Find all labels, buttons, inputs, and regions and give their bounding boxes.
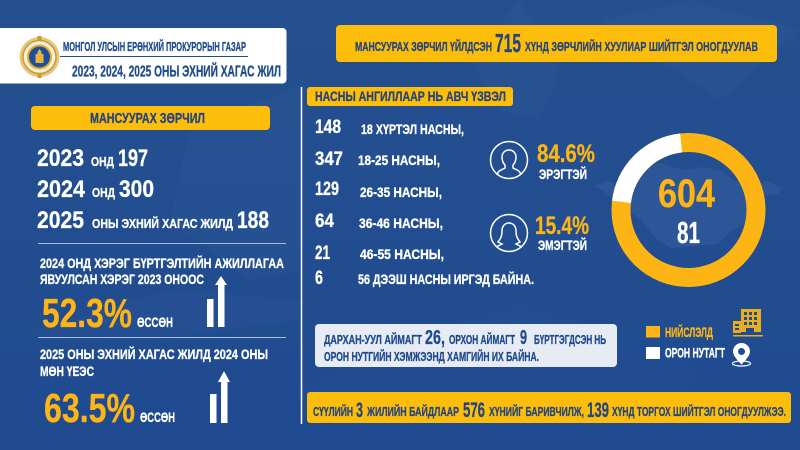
top banner [336,25,777,62]
age breakdown list: 18 ХҮРТЭЛ НАСНЫ, [361,122,464,137]
male share: 84.6% [537,140,595,168]
callout: Darkhan-Uul and Orkhon: ОРОН НУТГИЙН ХЭМЖЭЭНД ХАМГИЙН ИХ БАЙНА. [324,349,539,364]
bottom banner: ХҮНИЙГ БАРИВЧИЛЖ, [489,404,584,419]
yearly counts: ОНД [91,155,114,169]
stat: 63.5% growth [40,347,268,431]
donut chart: 81 [677,215,700,250]
yearly counts: 197 [118,145,148,172]
age breakdown list: 129 [315,178,339,200]
stat: 63.5% growth: 2025 ОНЫ ЭХНИЙ ХАГАС ЖИЛД 2024 ОНЫ [40,347,268,362]
bottom banner: 576 [463,399,485,422]
heading: age categories [307,87,513,106]
legend: ОРОН НУТАГТ [665,346,725,360]
header panel [0,28,286,84]
top banner: 715 [495,28,521,58]
yearly counts: 2025 [37,207,84,234]
icon: growth arrow [210,371,230,423]
callout: Darkhan-Uul and Orkhon: 26, [425,327,445,349]
callout: Darkhan-Uul and Orkhon: ОРХОН АЙМАГТ [449,332,515,347]
icon: location pin [732,343,750,366]
callout: Darkhan-Uul and Orkhon [315,324,617,367]
age breakdown list: 26-35 НАСНЫ, [360,185,442,200]
age breakdown list [315,116,534,289]
donut chart [593,142,783,278]
legend: НИЙСЛЭЛД [665,325,713,340]
map of Mongolia backdrop [593,163,783,248]
legend [646,309,763,366]
stat: 52.3% growth: ЯВУУЛСАН ХЭРЭГ 2023 ОНООС [40,272,204,287]
stat: 52.3% growth: 52.3% [42,290,132,336]
callout: Darkhan-Uul and Orkhon: БҮРТГЭГДСЭН НЬ [534,332,606,347]
male share [490,140,595,182]
callout: Darkhan-Uul and Orkhon: ДАРХАН-УУЛ АЙМАГТ [324,332,422,347]
yearly counts: 2024 [37,176,85,203]
callout: Darkhan-Uul and Orkhon: 9 [520,327,527,349]
heading: mansuurakh zorchil [31,106,270,130]
stat: 63.5% growth: 63.5% [44,385,135,431]
yearly counts: ОНД [92,186,115,200]
stat: 52.3% growth [40,256,284,336]
female share: 15.4% [535,212,589,240]
stat: 63.5% growth: МӨН ҮЕЭС [40,364,94,379]
yearly counts: ОНЫ ЭХНИЙ ХАГАС ЖИЛД [92,216,233,231]
bottom banner: СҮҮЛИЙН [313,404,353,419]
age breakdown list: 56 ДЭЭШ НАСНЫ ИРГЭД БАЙНА. [358,272,534,287]
top banner: МАНСУУРАХ ЗӨРЧИЛ ҮЙЛДСЭН [355,39,492,54]
bottom banner [307,392,791,423]
header title line 1: МОНГОЛ УЛСЫН ЕРӨНХИЙ ПРОКУРОРЫН ГАЗАР [63,39,246,54]
yearly counts: 300 [119,176,154,203]
icon: growth arrow [207,276,227,327]
heading: mansuurakh zorchil: МАНСУУРАХ ЗӨРЧИЛ [90,111,205,127]
age breakdown list: 64 [315,210,334,232]
bottom banner: ЖИЛИЙН БАЙДЛААР [366,404,459,419]
icon: man [490,142,528,178]
age breakdown list: 46-55 НАСНЫ, [360,247,444,262]
donut chart: 604 [658,172,716,216]
age breakdown list: 21 [315,242,330,264]
stat: 52.3% growth: ӨССӨН [137,314,173,330]
female share: ЭМЭГТЭЙ [538,238,587,253]
age breakdown list: 18-25 НАСНЫ, [358,153,440,168]
bottom banner: 3 [356,399,363,422]
icon: woman [490,214,528,252]
stat: 63.5% growth: ӨССӨН [140,409,175,425]
age breakdown list: 36-46 НАСНЫ, [359,216,443,231]
icon: prosecutor emblem [20,36,60,78]
icon: buildings [733,309,763,336]
age breakdown list: 6 [315,267,323,289]
age breakdown list: 148 [315,116,341,138]
yearly counts: 2023 [37,145,84,172]
age breakdown list: 347 [315,148,343,170]
stat: 52.3% growth: 2024 ОНД ХЭРЭГ БҮРТГЭЛТИЙН АЖИЛЛАГАА [40,256,284,271]
heading: age categories: НАСНЫ АНГИЛЛААР НЬ АВЧ ҮЗВЭЛ [315,89,506,104]
yearly counts [37,145,269,234]
yearly counts: 188 [237,207,269,234]
male share: ЭРЭГТЭЙ [539,167,587,182]
female share [490,212,589,253]
bottom banner: 139 [587,399,609,422]
header title line 2: 2023, 2024, 2025 ОНЫ ЭХНИЙ ХАГАС ЖИЛ [72,62,281,80]
